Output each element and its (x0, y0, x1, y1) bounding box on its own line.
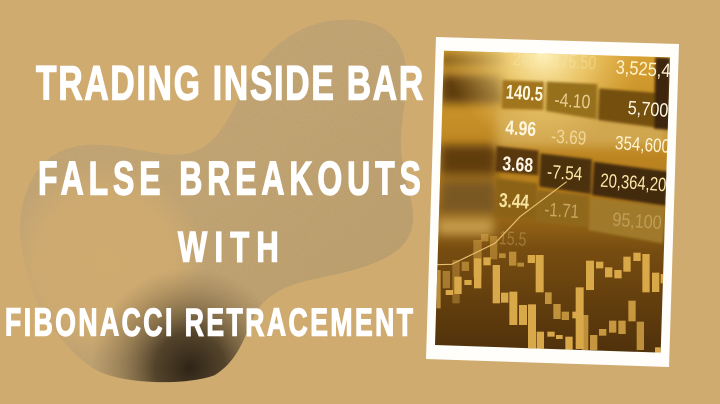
table cells (495, 57, 670, 243)
table figures: -7.54 (546, 162, 583, 185)
table figures: 3.44 (498, 190, 530, 214)
stock market photo (430, 47, 677, 357)
table figures: -4.10 (554, 90, 591, 113)
title: Trading Inside Bar: TRADING INSIDE BAR (36, 55, 423, 110)
table figures: 3.68 (502, 153, 534, 177)
table figures: 15.5 (498, 228, 527, 251)
polaroid frame (426, 37, 679, 367)
trend line (437, 182, 567, 265)
table figures: -1.71 (544, 200, 580, 223)
table figures: 20,364,20 (600, 171, 667, 196)
table figures: 95,100 (612, 210, 662, 234)
table figures: 354,600 (614, 133, 671, 158)
title: With: WITH (178, 222, 279, 271)
table figures: -3.69 (550, 126, 587, 150)
title: False Breakouts: FALSE BREAKOUTS (38, 152, 421, 205)
table figures: 4.96 (505, 117, 537, 141)
table figures: 140.5 (505, 81, 544, 106)
textured blob shape (20, 20, 413, 382)
table figures: 3,525,4 (615, 57, 672, 82)
candlestick chart (437, 234, 664, 353)
blurred left bands (437, 53, 667, 235)
table figures: 240.5 175.50 (512, 49, 597, 74)
table figures: 5,700 (627, 98, 669, 122)
title: Fibonacci Retracement: FIBONACCI RETRACEMENT (5, 302, 413, 345)
table figures (498, 49, 672, 251)
